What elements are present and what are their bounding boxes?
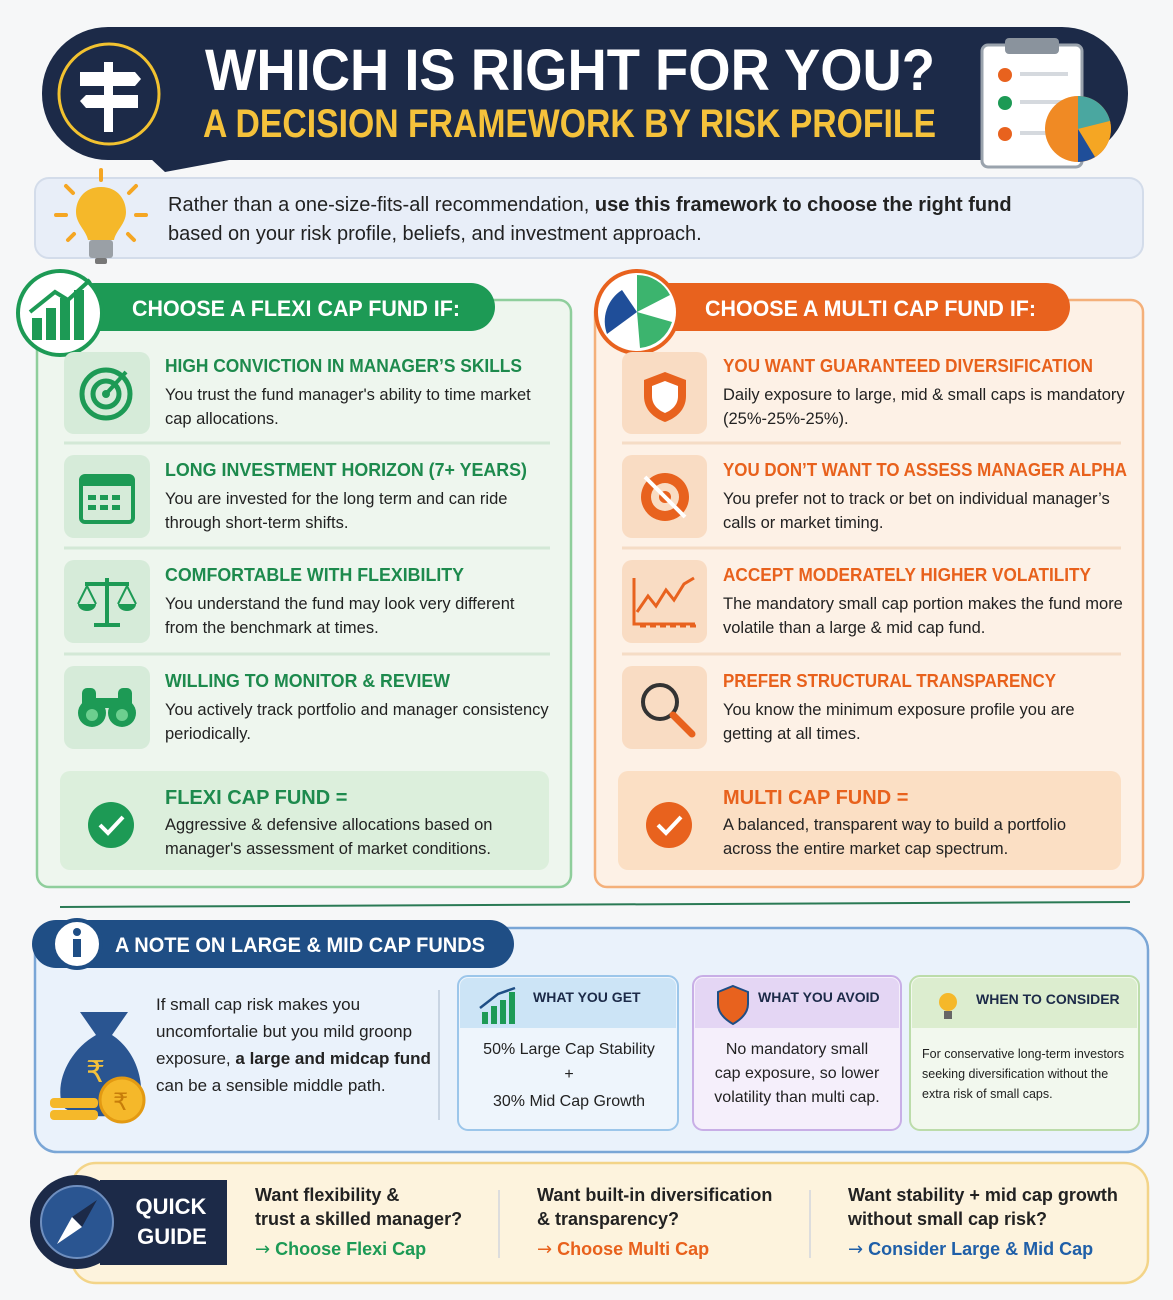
guide: multi: Want built-in diversification	[537, 1185, 772, 1205]
item: manager alpha: You prefer not to track or bet on individual manager’s	[723, 490, 1110, 508]
icon: money bag: ₹	[86, 1056, 105, 1089]
guide: large & mid	[847, 1185, 1118, 1260]
item: long horizon: through short-term shifts.	[165, 514, 348, 532]
item: monitor: You actively track portfolio and manager consistency	[165, 701, 549, 719]
card: what you get	[458, 976, 678, 1130]
icon: money bag: ₹	[113, 1089, 128, 1116]
guide: flexi	[255, 1185, 462, 1260]
panel: quick guide	[30, 1163, 1148, 1283]
item: long horizon	[64, 455, 527, 538]
intro box: based on your risk profile, beliefs, and investment approach.	[168, 223, 702, 245]
card: what you avoid: WHAT YOU AVOID	[758, 989, 880, 1005]
item: manager skills: HIGH CONVICTION IN MANAGER’S SKILLS	[165, 355, 522, 376]
item: monitor	[64, 666, 549, 749]
card: what you avoid	[693, 976, 901, 1130]
icon: signpost	[59, 44, 159, 144]
card: what you get: 50% Large Cap Stability	[483, 1041, 655, 1058]
item: long horizon: LONG INVESTMENT HORIZON (7+ YEARS)	[165, 459, 527, 480]
intro box	[35, 170, 1143, 264]
item: long horizon: You are invested for the long term and can ride	[165, 490, 507, 508]
guide: multi: & transparency?	[537, 1209, 679, 1229]
guide: large & mid: Want stability + mid cap growth	[848, 1185, 1118, 1205]
icon: growth chart circle	[18, 271, 102, 355]
item: diversification: YOU WANT GUARANTEED DIVERSIFICATION	[723, 355, 1093, 376]
flexi summary box: Aggressive & defensive allocations based on	[165, 816, 492, 834]
item: monitor: WILLING TO MONITOR & REVIEW	[165, 670, 451, 691]
note header pill	[32, 920, 514, 968]
header banner	[42, 27, 1128, 172]
flexi header pill	[70, 283, 495, 331]
item: manager skills	[64, 352, 531, 434]
quick guide label: GUIDE	[137, 1224, 207, 1249]
item: flexibility: COMFORTABLE WITH FLEXIBILITY	[165, 564, 465, 585]
multi summary box: A balanced, transparent way to build a portfolio	[723, 816, 1066, 834]
guide: flexi: Want flexibility &	[255, 1185, 399, 1205]
icon: clipboard with pie	[982, 38, 1111, 167]
item: flexibility: You understand the fund may look very different	[165, 595, 515, 613]
multi header pill	[640, 283, 1070, 331]
item: transparency: getting at all times.	[723, 725, 861, 743]
multi header pill: CHOOSE A MULTI CAP FUND IF:	[705, 296, 1036, 321]
multi summary box	[618, 771, 1121, 870]
multi summary box: MULTI CAP FUND =	[723, 787, 908, 809]
item: volatility	[622, 560, 1123, 643]
item: manager alpha: YOU DON’T WANT TO ASSESS MANAGER ALPHA	[723, 459, 1127, 480]
icon: money bag	[50, 1012, 144, 1122]
guide: multi: → Choose Multi Cap	[537, 1239, 709, 1260]
card: what you avoid: volatility than multi cap.	[714, 1089, 880, 1106]
item: transparency: PREFER STRUCTURAL TRANSPARENCY	[723, 670, 1057, 691]
icon: pie chart circle	[596, 271, 678, 353]
item: flexibility: from the benchmark at times.	[165, 619, 379, 637]
card: when to consider: seeking diversification without the	[922, 1067, 1108, 1081]
panel: flexi cap	[18, 271, 571, 887]
guide: large & mid: → Consider Large & Mid Cap	[848, 1239, 1093, 1260]
card: what you get: 30% Mid Cap Growth	[493, 1093, 645, 1110]
item: diversification	[622, 352, 1125, 434]
flexi summary box: FLEXI CAP FUND =	[165, 787, 347, 809]
quick guide label	[100, 1180, 227, 1265]
intro text: Rather than a one-size-fits-all recommendation, use this framework to choose the right fund	[168, 194, 1012, 216]
quick guide label: QUICK	[136, 1194, 207, 1219]
note header pill: A NOTE ON LARGE & MID CAP FUNDS	[115, 934, 485, 957]
subtitle: A DECISION FRAMEWORK BY RISK PROFILE	[203, 102, 936, 146]
guide: flexi: → Choose Flexi Cap	[255, 1239, 426, 1260]
card: when to consider: extra risk of small caps.	[922, 1087, 1053, 1101]
note text: uncomfortalie but you mild groonp	[156, 1022, 412, 1041]
item: flexibility	[64, 560, 515, 643]
card: what you avoid: cap exposure, so lower	[715, 1065, 880, 1082]
note text: can be a sensible middle path.	[156, 1076, 386, 1095]
card: when to consider: For conservative long-term investors	[922, 1047, 1124, 1061]
item: transparency: You know the minimum exposure profile you are	[723, 701, 1075, 719]
panel: multi cap	[595, 271, 1143, 887]
card: when to consider: WHEN TO CONSIDER	[976, 991, 1120, 1007]
guide: multi	[537, 1185, 772, 1260]
title: WHICH IS RIGHT FOR YOU?	[205, 38, 935, 103]
item: diversification: (25%-25%-25%).	[723, 410, 849, 428]
note text: exposure, a large and midcap fund	[156, 1049, 431, 1068]
card: what you avoid: No mandatory small	[726, 1041, 868, 1058]
item: manager skills: You trust the fund manager's ability to time market	[165, 386, 531, 404]
panel: large & mid cap note	[32, 920, 1148, 1152]
item: manager alpha: calls or market timing.	[723, 514, 883, 532]
item: manager alpha	[622, 455, 1127, 538]
flexi summary box: manager's assessment of market conditions.	[165, 840, 491, 858]
multi summary box: across the entire market cap spectrum.	[723, 840, 1008, 858]
item: diversification: Daily exposure to large, mid & small caps is mandatory	[723, 386, 1125, 404]
item: transparency	[622, 666, 1075, 749]
card: what you get: WHAT YOU GET	[533, 989, 641, 1005]
item: manager skills: cap allocations.	[165, 410, 279, 428]
guide: large & mid: without small cap risk?	[847, 1209, 1047, 1229]
flexi summary box	[60, 771, 549, 870]
icon: light bulb	[56, 170, 146, 264]
guide: flexi: trust a skilled manager?	[255, 1209, 462, 1229]
item: volatility: ACCEPT MODERATELY HIGHER VOLATILITY	[723, 564, 1092, 585]
note text	[156, 995, 431, 1095]
icon: compass	[30, 1175, 124, 1269]
item: volatility: The mandatory small cap portion makes the fund more	[723, 595, 1123, 613]
card: when to consider	[910, 976, 1139, 1130]
note text: If small cap risk makes you	[156, 995, 360, 1014]
flexi header pill: CHOOSE A FLEXI CAP FUND IF:	[132, 296, 460, 321]
card: what you get: +	[564, 1066, 574, 1083]
item: volatility: volatile than a large & mid cap fund.	[723, 619, 985, 637]
item: monitor: periodically.	[165, 725, 251, 743]
